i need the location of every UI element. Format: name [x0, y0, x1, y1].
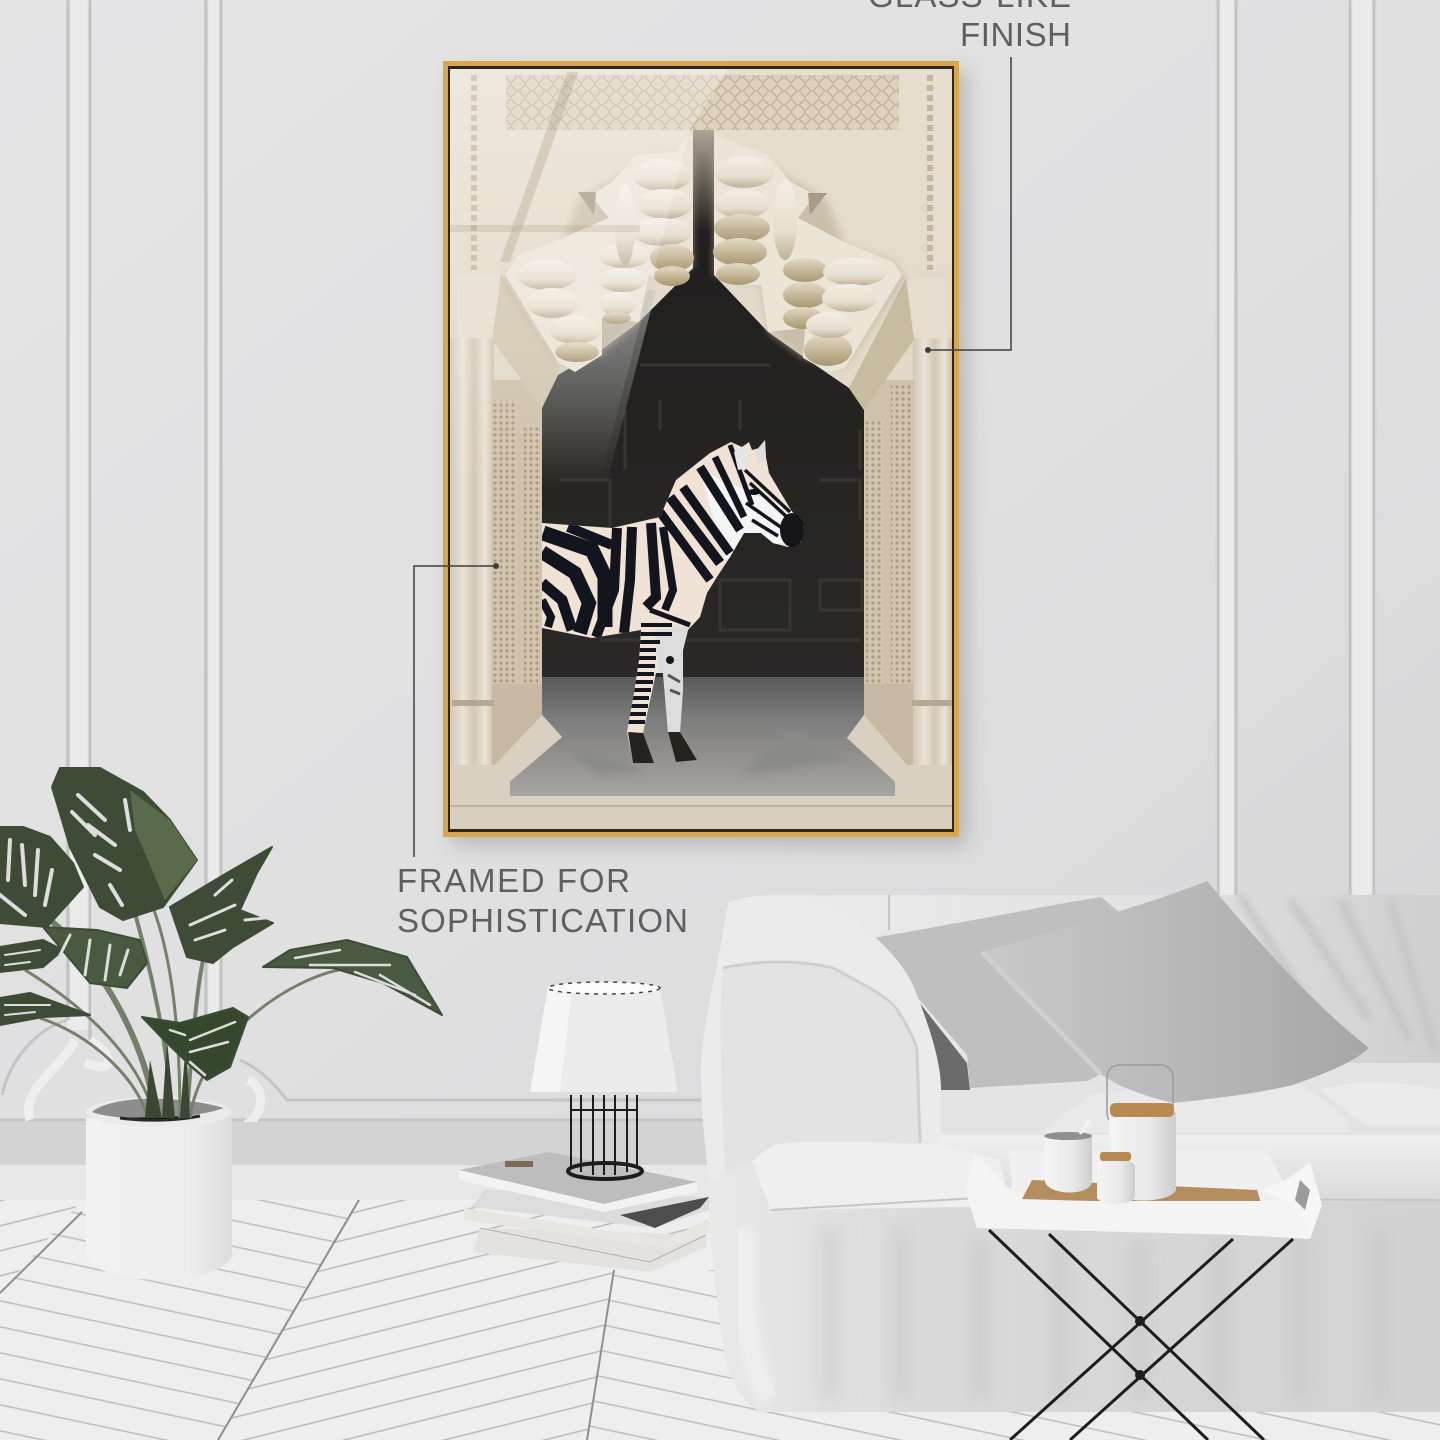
corbel shadow: [501, 150, 906, 368]
callout: framed for sophistication: [397, 563, 688, 939]
left corbel tiers: [517, 159, 693, 344]
lamp cage: [568, 1095, 642, 1179]
lamp on magazines: [459, 982, 709, 1272]
carved arch corbels: [505, 132, 902, 372]
carved side bands: [474, 75, 930, 270]
side table with tray and jars: [965, 1065, 1322, 1440]
callout: glass-like finish: [868, 0, 1071, 353]
horizontal reflection band: [450, 225, 640, 232]
front arm and base: [750, 1142, 1010, 1210]
gold frame: [443, 61, 959, 837]
artwork stone background: [450, 69, 952, 829]
left pillar: [450, 338, 562, 796]
zebra: [542, 440, 804, 763]
table legs: [989, 1230, 1293, 1440]
right corbel tiers: [714, 156, 774, 218]
sofa arm: [701, 895, 941, 1180]
baseboard: [0, 1165, 760, 1201]
sofa back: [786, 895, 1440, 1140]
doorway floor: [480, 677, 930, 798]
cushions: [867, 897, 1170, 1088]
lamp shade: [530, 987, 678, 1092]
frame shadow: [452, 70, 967, 845]
callout: glass-like finish: FINISH: [960, 16, 1071, 53]
sofa: [701, 881, 1440, 1412]
right pillar: [847, 338, 952, 796]
cup: [1044, 1134, 1092, 1192]
callout: framed for sophistication: FRAMED FOR: [397, 862, 630, 899]
monstera leaves: [0, 768, 442, 1080]
tray: [1001, 1150, 1298, 1206]
magazines: [459, 1152, 709, 1272]
pot: [86, 1118, 232, 1280]
herringbone floor: [0, 1200, 1440, 1440]
callout: framed for sophistication: SOPHISTICATION: [397, 902, 688, 939]
capitals and diagonal lintels: [457, 275, 948, 410]
carved frieze: [506, 75, 899, 130]
dark doorway: [542, 130, 864, 730]
rear seat cushions: [941, 1063, 1440, 1145]
front seat: [752, 1135, 1440, 1205]
framed artwork: [443, 61, 967, 845]
leaf cut-outs: [0, 795, 430, 1075]
lower wall band: [0, 1122, 760, 1166]
glass reflection on doorway: [542, 290, 656, 490]
plant with pot: [0, 768, 442, 1280]
jar handle: [1107, 1065, 1173, 1125]
bracket shadows: [578, 192, 827, 215]
wall panel mouldings: [0, 0, 1376, 1125]
fabric folds: [830, 1225, 1380, 1400]
glass glare: [450, 69, 727, 480]
stems: [25, 880, 350, 1118]
stone step: [450, 796, 952, 829]
large jar: [1109, 1112, 1176, 1200]
door panels: [560, 365, 862, 640]
small jar: [1097, 1160, 1135, 1204]
shadow gap under arm: [915, 997, 970, 1090]
diagonal reflection band: [500, 72, 578, 262]
